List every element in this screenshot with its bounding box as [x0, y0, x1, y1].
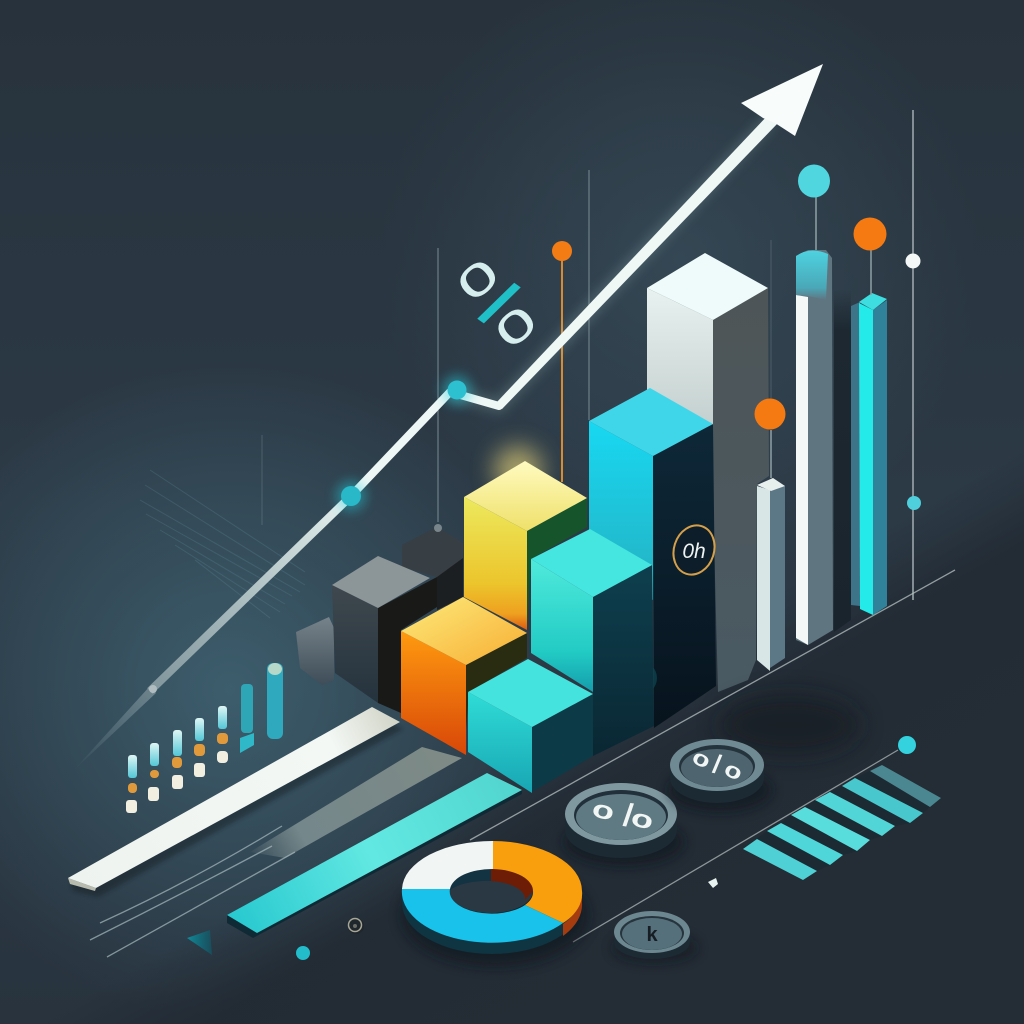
donut chart: [401, 841, 589, 967]
block: small back grey: [296, 617, 334, 685]
striped legend: [743, 765, 941, 880]
block: yellow: [464, 461, 587, 630]
floor shadow behind tall bars: [720, 695, 860, 755]
small bars chart: [126, 663, 283, 813]
percent symbol: [439, 239, 549, 360]
small diamond marker: [708, 878, 718, 888]
arrow node: tail: [149, 685, 157, 693]
coin percent text: o: [589, 794, 618, 826]
faint circle on blue block: [623, 661, 657, 695]
hatched background lines: [140, 470, 305, 618]
block: grey: [332, 556, 437, 713]
column 3: [172, 730, 183, 789]
column 7: [267, 663, 283, 739]
donut sector: orange: [493, 841, 582, 923]
block: blue: [589, 388, 721, 728]
block: teal middle: [531, 529, 654, 756]
coin: small: k: [646, 924, 658, 946]
small ring icon: [348, 918, 364, 934]
coin percent text: /: [710, 749, 724, 779]
floor bar: grey with streaks: [90, 747, 462, 957]
shadow slab between bars: [834, 290, 851, 632]
teal dot: [296, 946, 310, 960]
donut hole: [449, 869, 533, 913]
percent symbol: o: [477, 286, 549, 360]
orange guide with dot: [552, 241, 572, 482]
coin percent text: o: [628, 803, 657, 835]
arrow node: upper: [442, 375, 472, 405]
teal end dot: [898, 736, 916, 754]
tall bar: teal: [851, 293, 887, 615]
donut sector: blue: [402, 889, 563, 943]
coin percent text: [589, 794, 657, 835]
badge on blue block: [667, 520, 721, 580]
right guide with white and teal dots: [906, 110, 921, 600]
badge on blue block: 0h: [682, 540, 706, 563]
triangle marker: [187, 930, 212, 955]
block: teal front: [468, 659, 593, 793]
column 2: [148, 743, 159, 801]
coin: large percent: [564, 783, 684, 866]
glow above yellow block: [494, 446, 542, 494]
column 5: [217, 706, 228, 763]
coin percent text: o: [688, 745, 714, 774]
coin percent text: o: [720, 757, 746, 786]
coin percent text: [688, 745, 746, 786]
small white bar: [757, 478, 785, 671]
block: large white: [647, 253, 769, 692]
tall bar: white with teal cap: [796, 250, 833, 645]
arrow node: lower: [336, 481, 366, 511]
circle markers and stems: [754, 164, 886, 478]
column 4: [194, 718, 205, 777]
percent symbol: o: [439, 239, 511, 313]
column 6: [240, 684, 254, 753]
donut sector: white: [402, 841, 493, 889]
coin: small: [613, 911, 697, 962]
floor bar: teal: [227, 773, 522, 938]
block: dark back: [402, 524, 463, 610]
percent symbol: /: [469, 267, 528, 340]
baseline lines: [470, 570, 955, 942]
coin: medium percent: [668, 739, 772, 812]
rising arrow: [72, 64, 823, 772]
floor bar: white: [68, 707, 403, 897]
column 1: [126, 755, 137, 813]
coin percent text: /: [621, 797, 635, 833]
block: orange: [401, 597, 527, 755]
thin vertical guide lines: [262, 170, 771, 525]
